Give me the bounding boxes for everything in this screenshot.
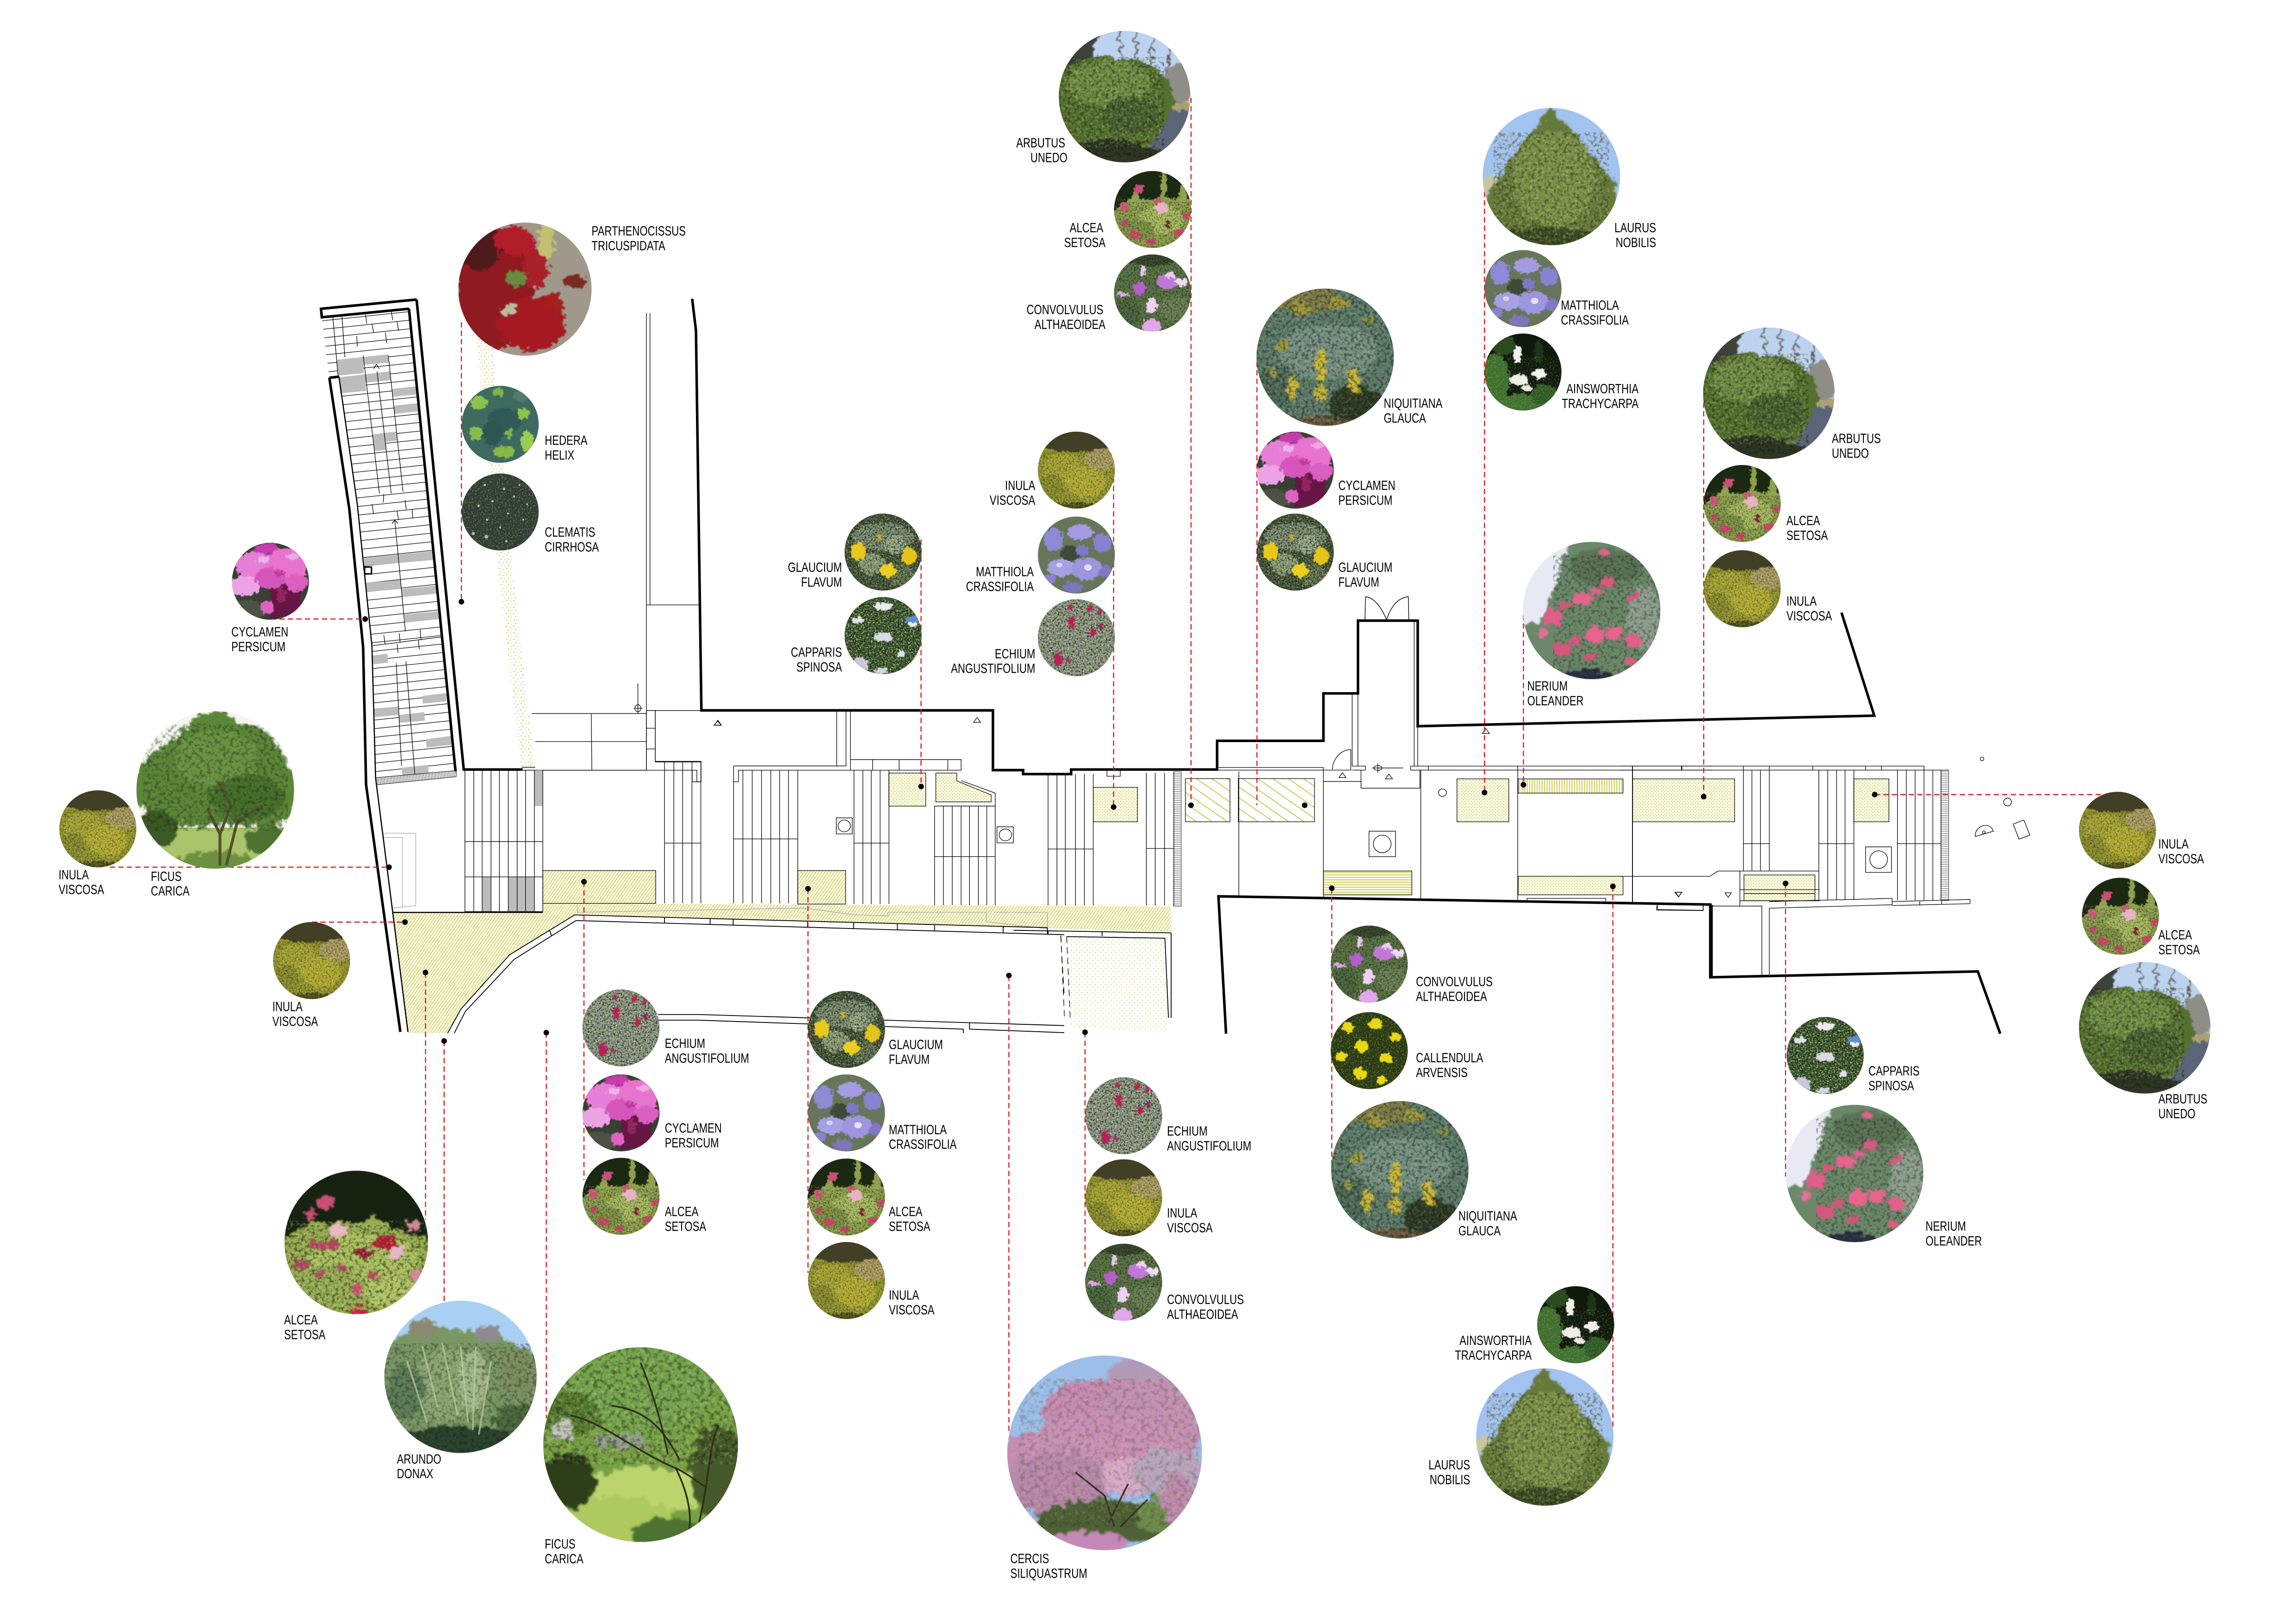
- planting strip: climber specks: [477, 338, 534, 766]
- plant: Inula viscosa (far west): VISCOSA: [59, 883, 105, 897]
- plant: Inula viscosa (north): VISCOSA: [990, 493, 1036, 508]
- plant: Parthenocissus tricuspidata: [459, 223, 686, 356]
- plant: Matthiola crassifolia (north): MATTHIOLA: [976, 565, 1034, 579]
- plant: Inula viscosa (south-west): INULA: [273, 1000, 303, 1014]
- plant: Arbutus unedo (east): ARBUTUS: [2159, 1092, 2207, 1107]
- plant: Callendula arvensis: [1331, 1012, 1483, 1089]
- plant: Laurus nobilis (south): NOBILIS: [1430, 1473, 1470, 1487]
- plant: Inula viscosa (north-east): VISCOSA: [1787, 609, 1832, 624]
- plant: Inula viscosa (north): INULA: [1005, 478, 1036, 493]
- plant: Capparis spinosa (south): [1787, 1017, 1919, 1094]
- plant: Hedera helix: HEDERA: [545, 434, 588, 448]
- plant: Nerium oleander (south): [1779, 1098, 1982, 1252]
- plant: Niquitiana glauca (north): [1255, 286, 1443, 435]
- plant: Convolvulus althaeoidea (column 3): CONVOLVULUS: [1167, 1293, 1244, 1307]
- plant: Inula viscosa (column 3): VISCOSA: [1167, 1221, 1213, 1235]
- plant: Ficus carica (south): FICUS: [545, 1537, 576, 1552]
- plant: Niquitiana glauca (north): GLAUCA: [1384, 411, 1426, 426]
- plant: Matthiola crassifolia (column 2): MATTHIOLA: [889, 1123, 947, 1137]
- wall: west inner: [339, 377, 408, 1032]
- plant: Glaucium flavum (column 2): GLAUCIUM: [889, 1038, 943, 1052]
- plan: site boundary walls: [321, 299, 2000, 1034]
- plant: Cyclamen persicum (column 1): CYCLAMEN: [665, 1121, 722, 1136]
- plant: Convolvulus althaeoidea (column 3): ALTHAEOIDEA: [1167, 1307, 1238, 1322]
- plant: Matthiola crassifolia (north-east): [1484, 250, 1629, 328]
- plant: Capparis spinosa (north-west): [791, 597, 922, 675]
- plant: Hedera helix: [462, 386, 588, 463]
- plant: Cyclamen persicum (north): PERSICUM: [1338, 493, 1392, 508]
- plant: Glaucium flavum (column 2): FLAVUM: [889, 1053, 930, 1067]
- plant: Ainsworthia trachycarpa (south): [1455, 1286, 1614, 1368]
- planting bed: vertical hatch: [1518, 779, 1623, 793]
- plant: Alcea setosa (large): SETOSA: [284, 1328, 326, 1342]
- plant: Alcea setosa (north): [1064, 169, 1195, 252]
- plant: Inula viscosa (column 3): INULA: [1167, 1206, 1198, 1220]
- plant: Glaucium flavum (north-west): FLAVUM: [801, 575, 842, 590]
- wall: south boundary: [1218, 896, 2000, 1034]
- plant: Clematis cirrhosa: CLEMATIS: [545, 525, 595, 540]
- plant: Capparis spinosa (south): CAPPARIS: [1868, 1064, 1919, 1078]
- plant: Alcea setosa (east): ALCEA: [2159, 928, 2192, 942]
- plant: Niquitiana glauca (south): NIQUITIANA: [1458, 1209, 1517, 1224]
- plant: Capparis spinosa (north-west): SPINOSA: [796, 660, 842, 675]
- wall: terrace edge: [392, 912, 465, 913]
- plant: Glaucium flavum (north): GLAUCIUM: [1338, 560, 1392, 575]
- plant: Cyclamen persicum (column 1): [579, 1074, 722, 1153]
- plan: terraced tower stair: [322, 309, 456, 785]
- planting beds: diagonal hatch: [1185, 779, 1315, 822]
- plant: Cercis siliquastrum: SILIQUASTRUM: [1011, 1567, 1087, 1581]
- plant: Hedera helix: HELIX: [545, 448, 574, 463]
- plant: Ainsworthia trachycarpa (north-east): AINSWORTHIA: [1566, 382, 1639, 396]
- plant: Convolvulus althaeoidea (north): ALTHAEOIDEA: [1035, 317, 1106, 332]
- plant: Inula viscosa (north): [990, 421, 1124, 518]
- plant: Inula viscosa (east): [2070, 781, 2204, 878]
- plant: Callendula arvensis: CALLENDULA: [1416, 1051, 1483, 1065]
- plant: Callendula arvensis: ARVENSIS: [1416, 1066, 1468, 1080]
- plan: stepped terraces west: [383, 711, 1064, 1033]
- plant: Echium angustifolium (column 3): ANGUSTIFOLIUM: [1167, 1139, 1251, 1153]
- plan: entrance doors: [1365, 597, 1409, 619]
- plant: Inula viscosa (east): VISCOSA: [2159, 852, 2204, 867]
- plant: Arundo donax: DONAX: [397, 1467, 433, 1481]
- plant: Parthenocissus tricuspidata: TRICUSPIDATA: [591, 239, 665, 254]
- plant: Arbutus unedo (north): UNEDO: [1030, 151, 1067, 165]
- plant: Niquitiana glauca (south): [1330, 1098, 1517, 1248]
- plant: Inula viscosa (column 2): VISCOSA: [889, 1303, 935, 1318]
- plant: Cyclamen persicum (north): [1253, 432, 1396, 510]
- plant: Echium angustifolium (north): ECHIUM: [995, 647, 1035, 662]
- plant: Alcea setosa (east): [2078, 875, 2200, 959]
- tower grey blocks and risers: [333, 311, 452, 775]
- plant: Arbutus unedo (north): [1016, 25, 1201, 172]
- plant: Inula viscosa (far west): INULA: [59, 868, 89, 882]
- plant: Echium angustifolium (north): [951, 599, 1115, 676]
- plant: Echium angustifolium (column 1): [583, 990, 749, 1066]
- plant: Arundo donax: [377, 1301, 544, 1481]
- plant: Cyclamen persicum (west): PERSICUM: [231, 640, 285, 654]
- plant: Alcea setosa (column 1): [579, 1156, 707, 1239]
- plant: Matthiola crassifolia (column 2): [808, 1074, 957, 1152]
- plant: Echium angustifolium (column 3): ECHIUM: [1167, 1124, 1208, 1139]
- plant: Ainsworthia trachycarpa (north-east): TRACHYCARPA: [1562, 396, 1639, 411]
- plant: Capparis spinosa (north-west): CAPPARIS: [791, 645, 842, 660]
- planting bed: lower dotted lawn: [1067, 936, 1168, 1032]
- plant: Convolvulus althaeoidea (north): [1026, 251, 1191, 335]
- plant: Alcea setosa (column 1): SETOSA: [665, 1220, 707, 1234]
- plant: Alcea setosa (column 2): ALCEA: [889, 1205, 923, 1219]
- plant: Inula viscosa (column 3): [1076, 1148, 1213, 1245]
- plant: Laurus nobilis (north): NOBILIS: [1616, 235, 1656, 250]
- plant: Cyclamen persicum (column 1): PERSICUM: [665, 1136, 719, 1151]
- plant: Matthiola crassifolia (north-east): CRASSIFOLIA: [1561, 313, 1629, 328]
- plant: Arbutus unedo (east): [2073, 955, 2221, 1121]
- plant: Arundo donax: ARUNDO: [397, 1452, 441, 1467]
- plant: Alcea setosa (north-east): SETOSA: [1787, 528, 1828, 543]
- plant: Ficus carica (west): FICUS: [151, 869, 181, 884]
- plan: dense tread strips: [1174, 772, 1181, 906]
- plan: east terraces: [1620, 757, 2030, 977]
- plant: Ficus carica (south): CARICA: [545, 1552, 584, 1567]
- plant: Parthenocissus tricuspidata: PARTHENOCISSUS: [591, 224, 686, 239]
- plant: Alcea setosa (north): ALCEA: [1070, 221, 1104, 235]
- plant: Alcea setosa (north): SETOSA: [1064, 235, 1106, 250]
- plant: Convolvulus althaeoidea (column 3): [1085, 1240, 1244, 1324]
- plan: upper access zone: [464, 313, 721, 782]
- plant: Matthiola crassifolia (north): [966, 516, 1115, 594]
- plant: Nerium oleander (north-east): [1516, 535, 1660, 708]
- plant: Inula viscosa (column 2): INULA: [889, 1288, 919, 1303]
- plant: Ficus carica (west): CARICA: [151, 884, 190, 898]
- plant: Arbutus unedo (north-east): ARBUTUS: [1832, 432, 1881, 446]
- plant: Arbutus unedo (north-east): UNEDO: [1832, 446, 1869, 461]
- tower foot hatch: [376, 771, 456, 785]
- plant: Ficus carica (west): [130, 711, 298, 898]
- plant: Convolvulus althaeoidea (column 4): CONVOLVULUS: [1416, 975, 1493, 989]
- plant: Clematis cirrhosa: [462, 473, 599, 555]
- plant: Glaucium flavum (north-west): GLAUCIUM: [788, 560, 842, 575]
- wall: west edge: [329, 377, 400, 1032]
- plant: Inula viscosa (south-west): VISCOSA: [273, 1015, 318, 1029]
- plant: Niquitiana glauca (south): GLAUCA: [1458, 1224, 1501, 1239]
- plant: Alcea setosa (large): [277, 1171, 435, 1342]
- plant: Matthiola crassifolia (north): CRASSIFOLIA: [966, 580, 1034, 594]
- plant: Ainsworthia trachycarpa (north-east): [1482, 334, 1639, 415]
- plant: Nerium oleander (north-east): NERIUM: [1527, 679, 1568, 694]
- plant: Inula viscosa (south-west): [264, 911, 360, 1029]
- plant: Cercis siliquastrum: CERCIS: [1011, 1552, 1049, 1566]
- planting bed: terrace rectangles: [543, 871, 846, 904]
- plant: Capparis spinosa (south): SPINOSA: [1868, 1079, 1914, 1093]
- plant: Echium angustifolium (column 3): [1085, 1077, 1251, 1154]
- annotation: red leader lines: [110, 98, 2103, 1432]
- plant: Echium angustifolium (column 1): ANGUSTIFOLIUM: [665, 1051, 749, 1066]
- plant: Convolvulus althaeoidea (column 4): ALTHAEOIDEA: [1416, 990, 1487, 1004]
- planting bed: horizontal hatch: [1323, 871, 1412, 895]
- plant: Alcea setosa (north-east): [1700, 463, 1828, 546]
- plant: Arbutus unedo (north-east): [1696, 321, 1881, 468]
- plant: Arbutus unedo (east): UNEDO: [2159, 1107, 2196, 1121]
- plant: Nerium oleander (south): OLEANDER: [1925, 1234, 1982, 1249]
- plant: Ainsworthia trachycarpa (south): TRACHYCARPA: [1455, 1348, 1532, 1363]
- plant: Matthiola crassifolia (column 2): CRASSIFOLIA: [889, 1138, 957, 1152]
- plant: Inula viscosa (far west): [50, 780, 146, 897]
- plant: Cercis siliquastrum: [999, 1356, 1202, 1581]
- plant: Inula viscosa (north-east): [1694, 539, 1832, 637]
- plant: Alcea setosa (large): ALCEA: [284, 1313, 318, 1327]
- annotation: location dots: [362, 599, 1878, 1044]
- plant: Inula viscosa (east): INULA: [2159, 837, 2189, 852]
- plan: planting beds: [392, 338, 1889, 1033]
- tower step rows: [322, 309, 455, 780]
- plant: Convolvulus althaeoidea (north): CONVOLVULUS: [1026, 303, 1103, 317]
- plan: central courtyard and gate: [1013, 620, 1712, 1018]
- plant: Laurus nobilis (north): [1477, 105, 1656, 258]
- plant: Alcea setosa (column 1): ALCEA: [665, 1205, 699, 1219]
- plant: Niquitiana glauca (north): NIQUITIANA: [1384, 396, 1443, 411]
- plant: Cyclamen persicum (north): CYCLAMEN: [1338, 478, 1396, 493]
- plant: Nerium oleander (north-east): OLEANDER: [1527, 694, 1584, 708]
- plant: Glaucium flavum (north-west): [788, 514, 922, 591]
- plant: Ainsworthia trachycarpa (south): AINSWORTHIA: [1459, 1333, 1532, 1348]
- plant: Cyclamen persicum (west): CYCLAMEN: [231, 625, 288, 639]
- plant: Cyclamen persicum (west): [229, 543, 309, 654]
- plant: Alcea setosa (column 2): SETOSA: [889, 1220, 931, 1234]
- plant: Inula viscosa (column 2): [799, 1231, 935, 1328]
- plant: Matthiola crassifolia (north-east): MATTHIOLA: [1561, 298, 1619, 313]
- plant: Glaucium flavum (column 2): [808, 991, 943, 1068]
- wall: tower outer: [321, 299, 522, 771]
- plant: Clematis cirrhosa: CIRRHOSA: [545, 540, 599, 555]
- plant: Nerium oleander (south): NERIUM: [1925, 1219, 1966, 1234]
- plant: Alcea setosa (column 2): [804, 1156, 931, 1239]
- planting beds: dotted squares: [889, 773, 1889, 901]
- plant: Echium angustifolium (north): ANGUSTIFOLIUM: [951, 662, 1035, 676]
- plant: Inula viscosa (north-east): INULA: [1787, 594, 1817, 609]
- planting bed: main hatched terrace strip: [392, 904, 1171, 1033]
- wall: north boundary: [692, 299, 1874, 774]
- plant: Alcea setosa (north-east): ALCEA: [1787, 514, 1820, 528]
- plant: Echium angustifolium (column 1): ECHIUM: [665, 1037, 705, 1051]
- plant: Glaucium flavum (north): FLAVUM: [1338, 575, 1379, 590]
- plant: Glaucium flavum (north): [1257, 514, 1392, 591]
- plant: Ficus carica (south): [537, 1344, 746, 1567]
- plant: Alcea setosa (east): SETOSA: [2159, 943, 2200, 957]
- plant: Laurus nobilis (north): LAURUS: [1614, 221, 1656, 235]
- plant: Arbutus unedo (north): ARBUTUS: [1016, 136, 1065, 150]
- plant: Laurus nobilis (south): [1428, 1366, 1619, 1518]
- plant: Laurus nobilis (south): LAURUS: [1428, 1458, 1470, 1473]
- plant: Convolvulus althaeoidea (column 4): [1331, 922, 1493, 1006]
